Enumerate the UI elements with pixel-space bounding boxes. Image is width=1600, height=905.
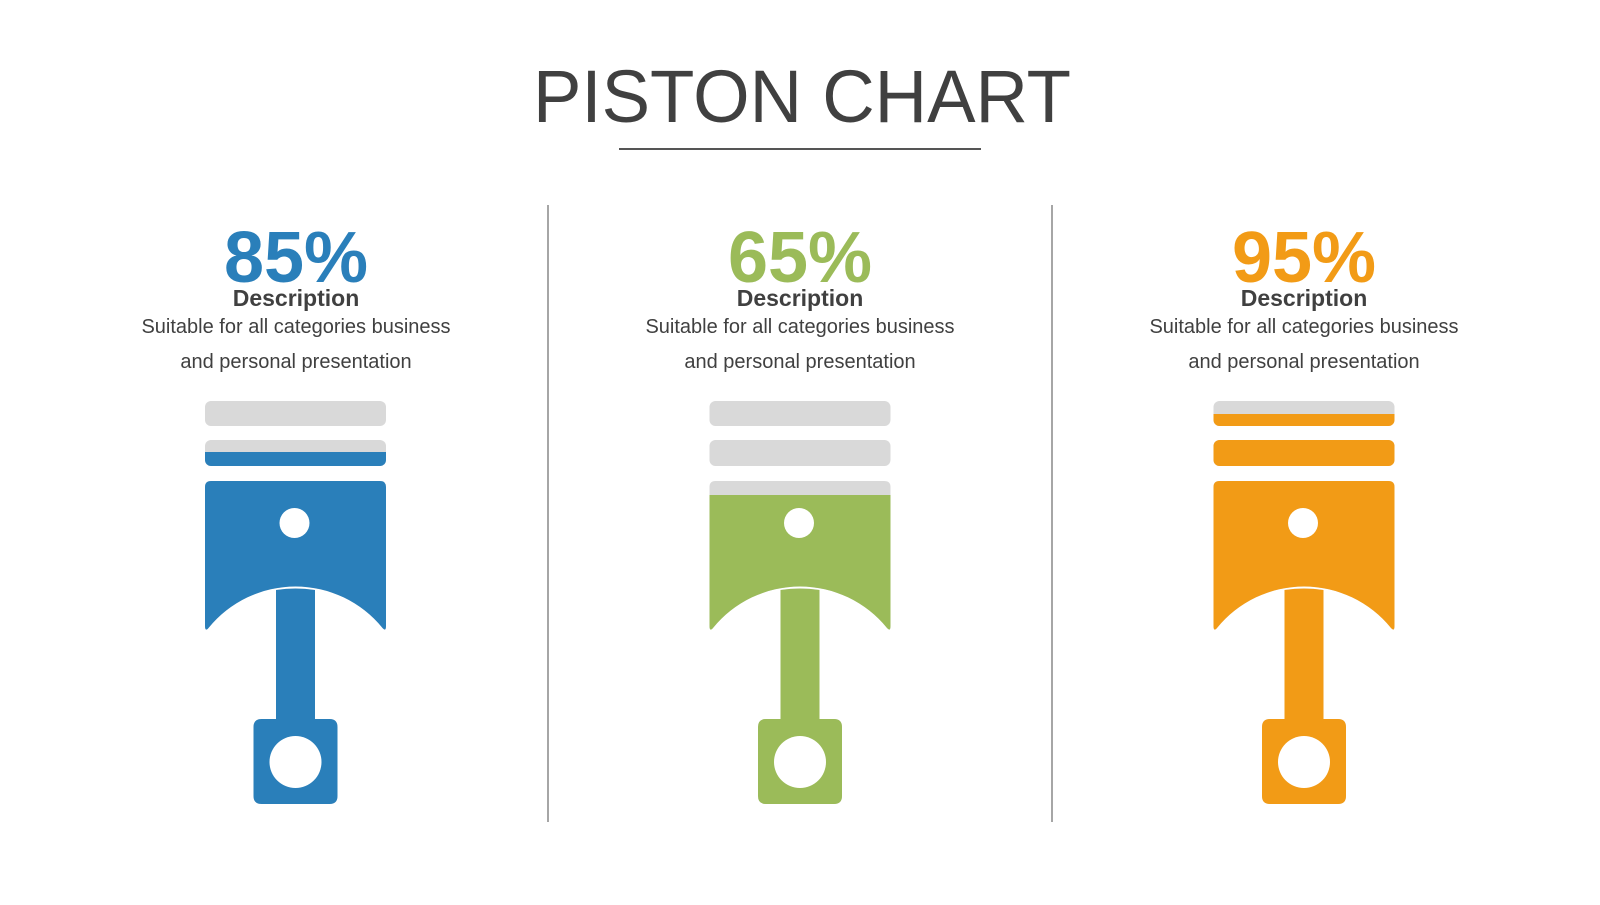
percentage: 65%: 65% bbox=[728, 218, 872, 298]
description text: Suitable for all categories business bbox=[645, 316, 955, 338]
description text: and personal presentation bbox=[1188, 351, 1420, 373]
percentage: 95%: 95% bbox=[1232, 218, 1376, 298]
panel: orange 95% bbox=[1149, 218, 1459, 804]
description heading: Description bbox=[737, 285, 863, 311]
description text: and personal presentation bbox=[684, 351, 916, 373]
panel: green 65% bbox=[645, 218, 955, 804]
icon: blue piston bbox=[205, 401, 386, 804]
description heading: Description bbox=[1241, 285, 1367, 311]
description text: Suitable for all categories business bbox=[141, 316, 451, 338]
description heading: Description bbox=[233, 285, 359, 311]
title: PISTON CHART bbox=[533, 55, 1071, 138]
description text: and personal presentation bbox=[180, 351, 412, 373]
panel: blue 85% bbox=[141, 218, 451, 804]
icon: green piston bbox=[710, 401, 890, 804]
description text: Suitable for all categories business bbox=[1149, 316, 1459, 338]
percentage: 85%: 85% bbox=[224, 218, 368, 298]
icon: orange piston bbox=[1214, 401, 1394, 804]
